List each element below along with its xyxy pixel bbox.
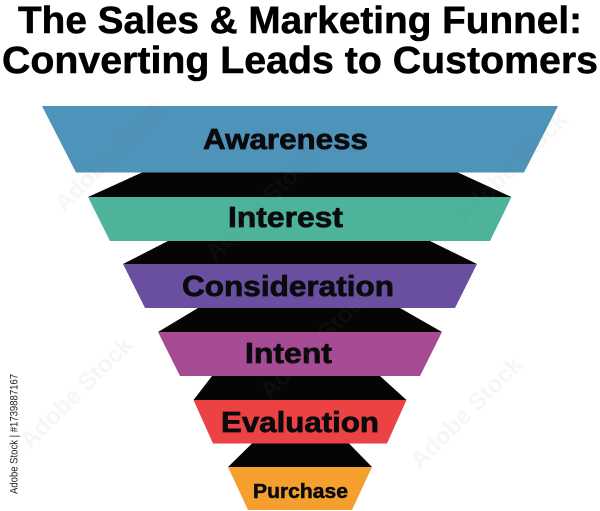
- watermarks: [15, 94, 573, 474]
- stock credit: Adobe Stock | #1739887167: [8, 374, 20, 494]
- funnel stage: Intent: [158, 332, 442, 376]
- funnel stage: Purchase: [228, 467, 372, 510]
- funnel diagram: [42, 106, 558, 510]
- funnel inner shadow 1: [88, 172, 512, 197]
- funnel inner shadow 2: [123, 241, 477, 264]
- funnel stage: Interest: [88, 197, 512, 241]
- funnel stage: Interest: Interest: [228, 202, 343, 234]
- watermarks: Adobe Stock: [49, 94, 172, 217]
- funnel stage: Intent: Intent: [245, 338, 332, 370]
- title: Converting Leads to Customers: [2, 40, 598, 82]
- watermarks: Adobe Stock: [200, 143, 323, 266]
- title: The Sales & Marketing Funnel:: [18, 0, 582, 42]
- funnel inner shadow 3: [158, 308, 442, 332]
- funnel inner shadow 5: [228, 444, 372, 467]
- watermarks: Adobe Stock: [255, 281, 378, 404]
- title: [2, 0, 598, 82]
- watermarks: Adobe Stock: [450, 106, 573, 229]
- funnel stage: Consideration: [123, 264, 477, 308]
- funnel inner shadow 4: [194, 376, 406, 400]
- funnel stage: Consideration: Consideration: [182, 271, 394, 303]
- funnel stage: Evaluation: [194, 400, 406, 444]
- funnel stage: Evaluation: Evaluation: [221, 407, 379, 439]
- funnel stage: Awareness: Awareness: [203, 124, 368, 156]
- watermarks: Adobe Stock: [405, 351, 528, 474]
- funnel stage: Awareness: [42, 106, 558, 172]
- funnel stage: Purchase: Purchase: [253, 481, 348, 503]
- watermarks: Adobe Stock: [15, 331, 138, 454]
